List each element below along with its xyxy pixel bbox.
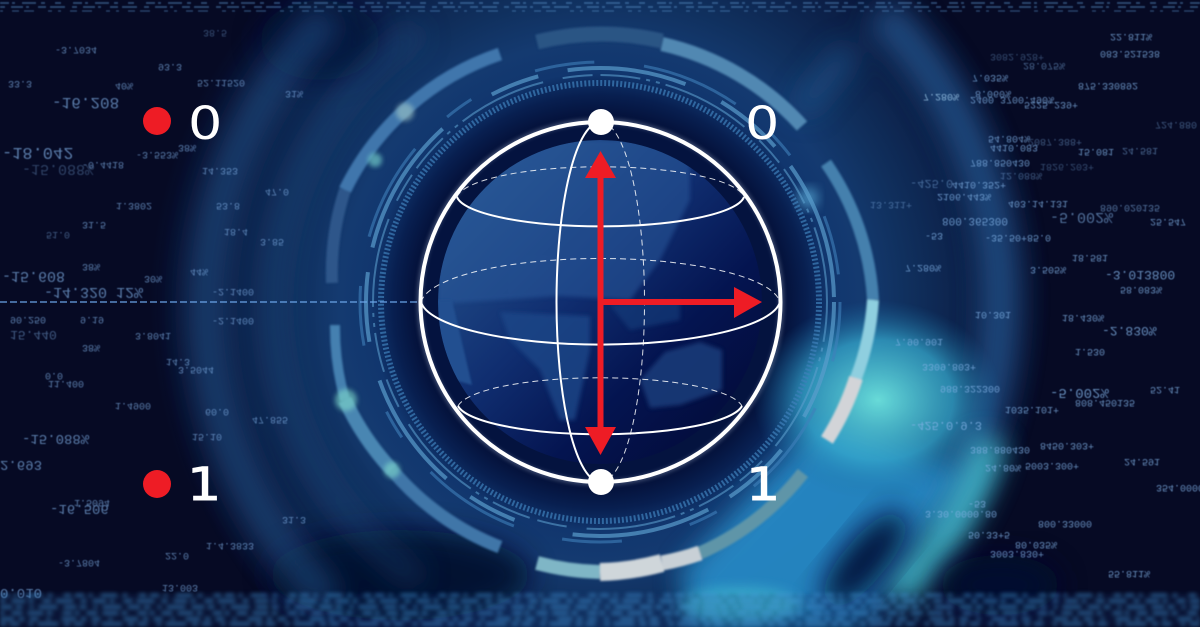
land: Africa edge <box>438 300 472 385</box>
scattered data numbers: left: 38% <box>82 260 100 271</box>
scattered data numbers: left: 14.353 <box>202 164 238 175</box>
scattered data numbers: left: 38.5 <box>203 26 227 37</box>
scattered data numbers: left: -15.088% <box>22 160 95 177</box>
scattered data numbers: left: 38% <box>82 341 100 352</box>
scattered data numbers: left: 13.003 <box>162 581 198 592</box>
scattered data numbers: right: 5225.239+ <box>1024 98 1078 109</box>
scattered data numbers: right: 2087.388+ <box>1028 135 1082 146</box>
scattered data numbers: right: -53 <box>968 497 986 508</box>
scattered data numbers: left: 51.0 <box>46 228 70 239</box>
scattered data numbers: right: 15.081 <box>1078 145 1114 156</box>
scattered data numbers: left: 53.8 <box>216 199 240 210</box>
scattered data numbers: left: 1.5094 <box>74 496 110 507</box>
scattered data numbers: right: 24.80% <box>985 461 1021 472</box>
scattered data numbers: right: 24.591 <box>1124 455 1160 466</box>
scattered data numbers: left: 31.5 <box>82 218 106 229</box>
label: 1 legend with red dot <box>143 458 221 511</box>
scattered data numbers: right: -35.50+85.0 <box>985 231 1051 242</box>
scattered data numbers: right: -53 <box>925 229 943 240</box>
scattered data numbers: left: 18.4 <box>224 225 248 236</box>
scattered data numbers: right: 388.880430 <box>970 443 1030 454</box>
scattered data numbers: right: 7.280% <box>923 90 959 101</box>
Bloch sphere wireframe <box>420 122 780 482</box>
scattered data numbers: right: 52.41 <box>1150 383 1180 394</box>
scattered data numbers: right: 808.450135 <box>1075 396 1135 407</box>
scattered data numbers: left: 3.5044 <box>178 363 214 374</box>
poles <box>588 109 614 495</box>
scattered data numbers: left: 93.3 <box>158 60 182 71</box>
scattered data numbers: right: -5.002% <box>1050 384 1109 400</box>
scattered data numbers: right: 80.035% <box>1015 538 1057 549</box>
inner HUD rings <box>360 62 840 542</box>
scattered data numbers: left: 60.0 <box>205 405 229 416</box>
scattered data numbers: left: 22.0 <box>165 549 189 560</box>
scattered data numbers: right: 18.430% <box>1062 311 1104 322</box>
scattered data numbers: left: -2.1400 <box>212 285 254 296</box>
scattered data numbers: right: -3.013800 <box>1105 267 1175 282</box>
scattered data numbers: left: -0.4418 <box>82 158 124 169</box>
scattered data numbers: left: 33.3 <box>8 77 32 88</box>
outer blurred arcs <box>206 12 1000 600</box>
land: Australia <box>640 342 722 408</box>
scattered data numbers: left: 3.8041 <box>135 329 171 340</box>
scattered data numbers: right: 8.060% <box>975 87 1011 98</box>
land: islands <box>612 305 681 330</box>
scattered data numbers: left: 1.3802 <box>116 199 152 210</box>
scattered data numbers: left: 90.250 <box>10 313 46 324</box>
scattered data numbers: right: 4410.083 <box>990 141 1038 152</box>
label: bottom 1: 1 <box>746 458 780 511</box>
scattered data numbers: right: 788.850430 <box>970 156 1030 167</box>
scattered data numbers: right: 22.811% <box>1110 30 1152 41</box>
scattered data numbers: left: 15.440 <box>10 327 57 342</box>
scattered data numbers: right: -2.830% <box>1102 323 1157 338</box>
scattered data numbers: left: 1.4.3833 <box>206 539 254 550</box>
scattered data numbers: left: -18.042 <box>2 142 73 161</box>
scattered data numbers: left: 11.400 <box>48 377 84 388</box>
scattered data numbers: right: 28.075% <box>1023 59 1065 70</box>
scattered data numbers: right: 988.322300 <box>940 382 1000 393</box>
scattered data numbers: right: 58.083% <box>1120 283 1162 294</box>
scattered data numbers: right: -425.0.9.3 <box>910 418 982 432</box>
scattered data numbers: left: 52.11520 <box>197 76 245 87</box>
globe base <box>438 140 762 464</box>
scattered data numbers: left: -14.320 12% <box>44 283 144 300</box>
horizontal dashed axis line <box>0 301 420 303</box>
scattered data numbers: right <box>870 30 1200 578</box>
scattered data numbers: left: 0.0 <box>45 369 63 380</box>
scattered data numbers: right: 1826.203+ <box>1040 160 1094 171</box>
scattered data numbers: right: 50.33+5 <box>968 528 1010 539</box>
scattered data numbers: right: 1.530 <box>1075 345 1105 356</box>
bottom data band <box>0 594 1200 627</box>
top data band <box>0 3 1200 11</box>
scattered data numbers: left <box>0 26 306 600</box>
outer segmented HUD band <box>332 34 873 572</box>
globe <box>420 122 780 482</box>
land: Eurasia <box>438 140 690 304</box>
scattered data numbers: left: 0.010 <box>0 584 42 600</box>
scattered data numbers: right: 12.088% <box>1000 169 1042 180</box>
scattered data numbers: right: 3082.928+ <box>990 50 1044 61</box>
scattered data numbers: left: 31.3 <box>282 513 306 524</box>
scattered data numbers: right: 403.14.131 <box>1008 197 1068 208</box>
scattered data numbers: left: -3.7804 <box>58 556 100 567</box>
scattered data numbers: right: 724.880 <box>1155 118 1197 129</box>
scattered data numbers: left: 30% <box>144 272 162 283</box>
scattered data numbers: right: -425.0 <box>910 176 953 190</box>
scattered data numbers: right: 4410.352+ <box>952 178 1006 189</box>
scattered data numbers: left: 47.0 <box>265 185 289 196</box>
scattered data numbers: right: 7.90.901 <box>895 335 943 346</box>
scattered data numbers: right: 7.280% <box>905 261 941 272</box>
scattered data numbers: right: 25.547 <box>1150 215 1186 226</box>
scattered data numbers: right: 24.581 <box>1122 144 1158 155</box>
scattered data numbers: right: 875.330892 <box>1078 79 1138 90</box>
scattered data numbers: right: 5003.300+ <box>1025 459 1079 470</box>
scattered data numbers: left: -16.506 <box>50 500 109 516</box>
scattered data numbers: right: 2400 3700.490% <box>970 93 1054 104</box>
scattered data numbers: right: 3.505% <box>1030 263 1066 274</box>
sphere halo <box>420 121 782 483</box>
scattered data numbers: right: 3003.830+ <box>990 547 1044 558</box>
scattered data numbers: right: 13.311+ <box>870 198 912 209</box>
scattered data numbers: left: 1.4900 <box>115 399 151 410</box>
scattered data numbers: left: 38% <box>178 141 196 152</box>
scattered data numbers: right: 890.020135 <box>1100 201 1160 212</box>
label: top 0: 0 <box>745 97 779 150</box>
scattered data numbers: left: 9.19 <box>80 313 104 324</box>
lens flare bottom right <box>680 300 1060 625</box>
scattered data numbers: left: 40% <box>115 79 133 90</box>
scattered data numbers: right: -5.002% <box>1050 208 1114 225</box>
scattered data numbers: right: 800.33000 <box>1038 517 1092 528</box>
scattered data numbers: right: 55.811% <box>1108 567 1150 578</box>
scattered data numbers: right: 7.035% <box>972 71 1008 82</box>
label: 0 legend with red dot: 0 <box>188 97 222 150</box>
scattered data numbers: left: -15.608 <box>2 267 65 284</box>
scattered data numbers: left: -3.553% <box>136 148 178 159</box>
scattered data numbers: right: 8450.303+ <box>1040 439 1094 450</box>
land: South America <box>500 312 590 420</box>
scattered data numbers: left: 31% <box>285 87 303 98</box>
scattered data numbers: left: 2.693 <box>0 456 42 472</box>
scattered data numbers: left: 3.85 <box>260 235 284 246</box>
scattered data numbers: left: -3.7034 <box>55 43 97 54</box>
scattered data numbers: left: 47.855 <box>252 413 288 424</box>
scattered data numbers: left: 44% <box>190 265 208 276</box>
scattered data numbers: right: 1035.101+ <box>1005 403 1059 414</box>
scattered data numbers: left: 15.10 <box>192 430 222 441</box>
label: 0 legend with red dot <box>143 97 222 150</box>
scattered data numbers: left: 14.3 <box>166 355 190 366</box>
scattered data numbers: left: -15.088% <box>22 430 90 446</box>
scattered data numbers: right: 083.521538 <box>1100 47 1160 58</box>
scattered data numbers: right: 2106.443% <box>937 190 991 201</box>
red arrows <box>585 151 762 455</box>
scattered data numbers: right: 54.804% <box>988 132 1030 143</box>
label: 1 legend with red dot: 1 <box>187 458 221 511</box>
scattered data numbers: right: 800.365300 <box>942 214 1008 226</box>
scattered data numbers: left: -16.208 <box>52 93 119 111</box>
scattered data numbers: left: -2.1400 <box>212 314 254 325</box>
scattered data numbers: right: 3309.803+ <box>922 360 976 371</box>
scattered data numbers: right: 18.581 <box>1072 251 1108 262</box>
scattered data numbers: right: 10.301 <box>975 308 1011 319</box>
scattered data numbers: right: 3.30.0000.80 <box>925 507 997 518</box>
